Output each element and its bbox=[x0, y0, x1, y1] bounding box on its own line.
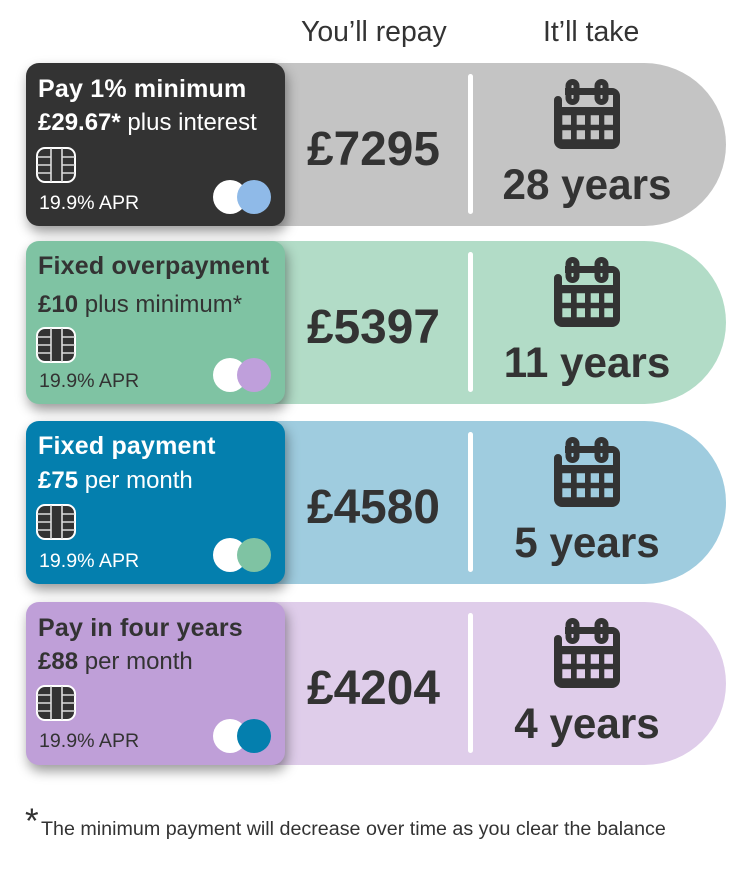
footnote text: The minimum payment will decrease over time as you clear the balance bbox=[41, 818, 666, 840]
divider bbox=[468, 252, 473, 392]
card payment: £10 plus minimum* bbox=[38, 291, 242, 318]
row: pay in four years bbox=[20, 600, 726, 779]
duration: 5 years bbox=[514, 518, 660, 566]
divider bbox=[468, 432, 473, 572]
card bbox=[26, 63, 285, 226]
calendar icon bbox=[554, 618, 620, 688]
apr: 19.9% APR bbox=[39, 192, 139, 214]
asterisk: * bbox=[25, 802, 39, 841]
chip icon bbox=[36, 147, 76, 183]
calendar icon bbox=[554, 257, 620, 327]
result pill bbox=[126, 421, 726, 584]
apr: 19.9% APR bbox=[39, 730, 139, 752]
result pill bbox=[126, 602, 726, 765]
row: pay 1% minimum bbox=[20, 61, 726, 240]
amount repaid: £7295 bbox=[307, 123, 440, 176]
duration: 28 years bbox=[503, 160, 671, 208]
chip icon bbox=[36, 685, 76, 721]
row: fixed payment bbox=[20, 419, 726, 598]
chip icon bbox=[36, 327, 76, 363]
apr: 19.9% APR bbox=[39, 370, 139, 392]
card bbox=[26, 421, 285, 584]
amount repaid: £4204 bbox=[307, 662, 440, 715]
result pill bbox=[126, 241, 726, 404]
amount repaid: £5397 bbox=[307, 301, 440, 354]
card payment: £75 per month bbox=[38, 467, 193, 494]
card title: Fixed payment bbox=[38, 432, 216, 460]
row: fixed overpayment bbox=[20, 239, 726, 418]
card payment: £29.67* plus interest bbox=[38, 109, 257, 136]
amount repaid: £4580 bbox=[307, 481, 440, 534]
duration: 11 years bbox=[504, 338, 670, 386]
logo circles bbox=[213, 719, 247, 753]
card title: Pay 1% minimum bbox=[38, 75, 246, 103]
logo circles bbox=[213, 358, 247, 392]
calendar icon bbox=[554, 437, 620, 507]
heading: you'll repay: You’ll repay bbox=[301, 16, 447, 48]
logo circles bbox=[213, 180, 247, 214]
divider bbox=[468, 613, 473, 753]
card title: Fixed overpayment bbox=[38, 252, 269, 280]
calendar icon bbox=[554, 79, 620, 149]
result pill bbox=[126, 63, 726, 226]
logo circles bbox=[213, 538, 247, 572]
chip icon bbox=[36, 504, 76, 540]
divider bbox=[468, 74, 473, 214]
footnote bbox=[25, 802, 666, 841]
apr: 19.9% APR bbox=[39, 550, 139, 572]
card bbox=[26, 241, 285, 404]
card title: Pay in four years bbox=[38, 614, 243, 642]
heading: it'll take: It’ll take bbox=[543, 16, 639, 48]
card bbox=[26, 602, 285, 765]
duration: 4 years bbox=[514, 700, 660, 746]
card payment: £88 per month bbox=[38, 648, 193, 675]
